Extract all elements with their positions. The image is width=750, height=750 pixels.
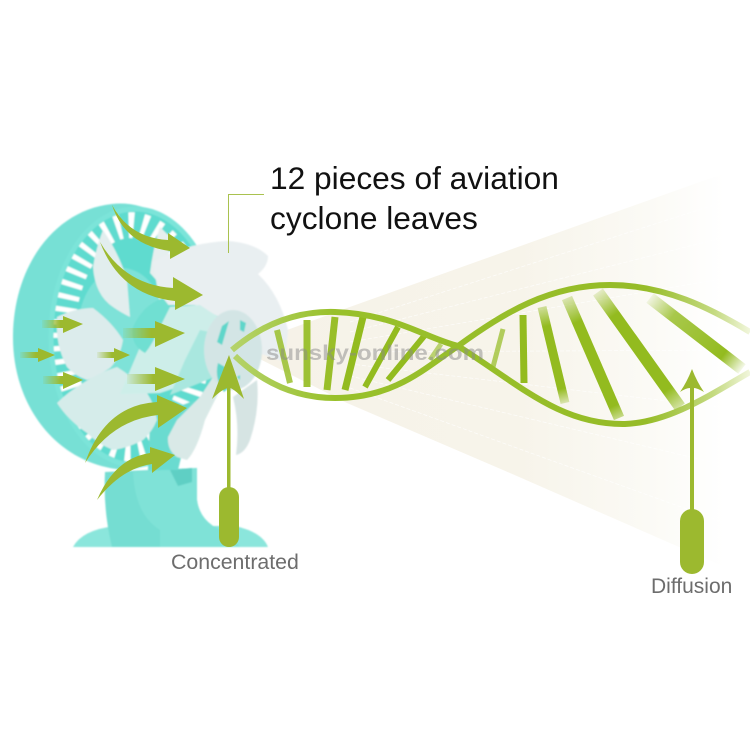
straight arrow 4 — [97, 348, 130, 362]
diffusion arrow — [680, 369, 704, 574]
leader line — [228, 194, 264, 253]
DNA helix — [232, 285, 750, 424]
fan stem — [148, 400, 195, 470]
straight arrow 3 — [43, 372, 83, 389]
curved arrow 4 — [97, 447, 175, 500]
rear blades — [57, 227, 170, 450]
rear hub — [78, 268, 166, 392]
concentrated arrow — [212, 355, 244, 547]
fan base — [73, 468, 268, 547]
straight arrow 6 — [127, 367, 185, 391]
intake arrows — [20, 205, 203, 500]
label: concentrated: Concentrated — [171, 550, 299, 574]
airflow beam — [238, 165, 750, 578]
fan body — [13, 204, 288, 547]
DNA rungs — [277, 292, 742, 418]
straight arrow 5 — [123, 321, 185, 347]
straight arrow 1 — [42, 316, 83, 333]
front hub — [204, 310, 262, 392]
fan housing — [13, 204, 219, 470]
DNA strand B — [235, 285, 750, 398]
heading: cyclone leaves — [270, 200, 478, 236]
straight arrow 2 — [20, 348, 55, 362]
heading: 12 pieces of aviation — [270, 160, 559, 196]
watermark: sunsky-online.com — [266, 342, 484, 365]
turquoise blade edge — [132, 298, 170, 353]
curved arrow 1 — [112, 205, 190, 259]
curved arrow 2 — [100, 242, 203, 310]
curved arrow 3 — [85, 395, 187, 463]
DNA strand A — [232, 312, 750, 424]
front blades — [120, 241, 288, 460]
heading — [270, 160, 559, 236]
label: diffusion: Diffusion — [651, 575, 732, 598]
